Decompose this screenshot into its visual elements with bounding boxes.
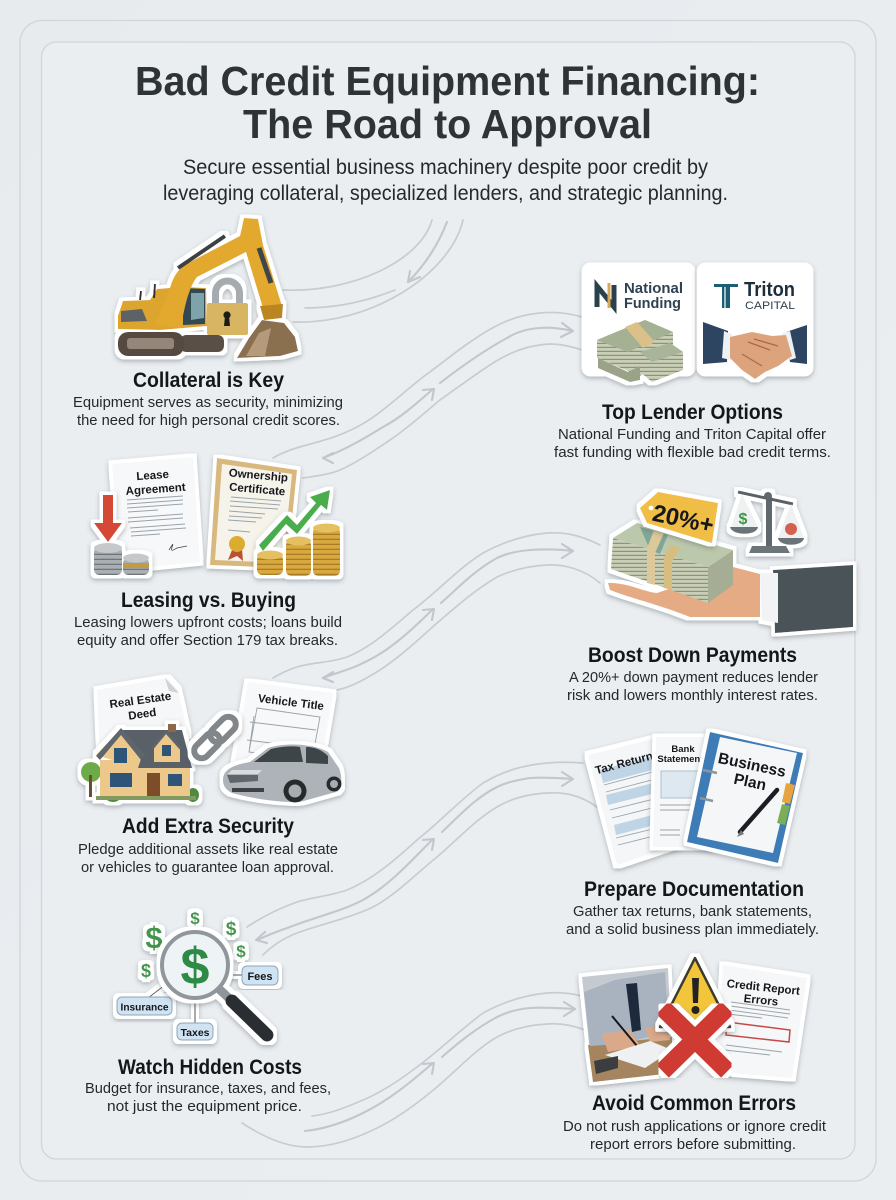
icon: ownership certificate	[210, 458, 297, 568]
icon: red cross	[669, 1014, 721, 1065]
icon: bank statements	[653, 737, 712, 847]
heading: Avoid Common Errors	[592, 1091, 796, 1115]
panel: leasing vs buying	[74, 457, 342, 649]
icon: taxes tag: Taxes	[180, 1027, 210, 1039]
icon: credit report errors document	[717, 965, 807, 1078]
panel: add extra security	[78, 678, 342, 876]
icon: insurance tag	[117, 985, 172, 1015]
arrow: collateral to lenders to leasing	[273, 312, 582, 478]
icon: person signing photo	[582, 968, 673, 1082]
icon: balance scale	[730, 492, 804, 553]
description	[563, 1118, 827, 1153]
description: Equipment serves as security, minimizing	[73, 394, 343, 411]
description	[73, 394, 343, 429]
icon: insurance tag: Insurance	[120, 1002, 169, 1014]
icon: floating dollar signs: $	[236, 942, 246, 961]
description: not just the equipment price.	[107, 1098, 302, 1115]
icon: hand holding money with tag	[608, 523, 853, 633]
icon: business plan binder: Plan	[732, 771, 768, 794]
heading: Collateral is Key	[133, 368, 284, 392]
description: fast funding with flexible bad credit terms.	[554, 444, 831, 461]
description: report errors before submitting.	[590, 1136, 796, 1153]
icon: 20 percent price tag	[640, 492, 718, 543]
panel: collateral is key	[73, 218, 343, 429]
description	[78, 841, 338, 876]
icon: excavator with padlock	[118, 218, 298, 358]
description	[74, 614, 342, 649]
icon: floating dollar signs: $	[226, 919, 237, 940]
heading: Boost Down Payments	[588, 643, 797, 667]
heading: Watch Hidden Costs	[118, 1055, 302, 1079]
icon: lease agreement: Agreement	[125, 482, 186, 498]
panel: top lender options	[554, 266, 831, 461]
icon: floating dollar signs: $	[141, 961, 151, 981]
description: Budget for insurance, taxes, and fees,	[85, 1080, 331, 1097]
description: and a solid business plan immediately.	[566, 921, 819, 938]
description	[567, 669, 818, 704]
icon: real estate deed: Deed	[128, 707, 157, 723]
icon: gold coins and green growth arrow	[257, 490, 340, 576]
arrow: leasing to down payments to security	[273, 533, 600, 690]
icon: triton capital card: Triton	[744, 279, 795, 301]
panel: watch hidden costs	[85, 909, 331, 1115]
icon: red down arrow and silver coins	[94, 495, 149, 575]
icon: house	[81, 724, 199, 802]
arrow: security to documentation to hidden costs	[247, 762, 597, 955]
panel: avoid common errors	[563, 958, 827, 1153]
heading: Prepare Documentation	[584, 877, 804, 901]
icon: balance scale: $	[739, 511, 748, 528]
icon: bank statements: Statements	[657, 754, 709, 765]
icon: tax returns	[588, 738, 683, 865]
icon: triton capital card: CAPITAL	[745, 300, 795, 312]
icon: vehicle title	[234, 682, 333, 770]
description: or vehicles to guarantee loan approval.	[81, 859, 334, 876]
icon: ownership certificate: Certificate	[229, 482, 286, 498]
arrow: hidden costs to common errors	[242, 993, 585, 1147]
subtitle	[163, 156, 728, 205]
description	[554, 426, 831, 461]
icon: national funding card: Funding	[624, 295, 681, 312]
description: Leasing lowers upfront costs; loans build	[74, 614, 342, 631]
icon: ownership certificate: Ownership	[228, 467, 288, 485]
description: National Funding and Triton Capital offer	[558, 426, 826, 443]
description: Gather tax returns, bank statements,	[573, 903, 812, 920]
heading: Add Extra Security	[122, 814, 294, 838]
panel: boost down payments	[567, 492, 853, 704]
icon: credit report errors document: Errors	[743, 993, 779, 1009]
icon: magnifying glass: $	[181, 938, 210, 996]
icon: fees tag	[225, 966, 278, 985]
title: Bad Credit Equipment Financing:	[135, 58, 760, 104]
icon: national funding card	[585, 266, 692, 382]
icon: chain link	[191, 714, 239, 761]
icon: real estate deed	[97, 678, 188, 760]
description: equity and offer Section 179 tax breaks.	[77, 632, 338, 649]
description	[85, 1080, 331, 1115]
icon: vehicle title: Vehicle Title	[257, 693, 324, 713]
panel: prepare documentation	[566, 732, 819, 938]
icon: fees tag: Fees	[247, 971, 273, 983]
title	[135, 58, 760, 147]
icon: floating dollar signs: $	[190, 909, 200, 928]
icon: magnifying glass	[162, 932, 267, 1035]
icon: real estate deed: Real Estate	[109, 691, 172, 711]
icon: bank statements: Bank	[671, 744, 695, 755]
icon: lease agreement: Lease	[136, 469, 169, 483]
icon: triton capital card	[700, 266, 810, 379]
title: The Road to Approval	[243, 101, 652, 147]
icon: taxes tag	[177, 1000, 213, 1040]
heading: Leasing vs. Buying	[121, 588, 296, 612]
icon: national funding card: National	[624, 280, 683, 297]
description: A 20%+ down payment reduces lender	[569, 669, 818, 686]
icon: business plan binder: Business	[716, 750, 787, 781]
arrow: intro to collateral	[283, 220, 463, 322]
description: risk and lowers monthly interest rates.	[567, 687, 818, 704]
description	[566, 903, 819, 938]
icon: business plan binder	[687, 732, 803, 863]
description: Do not rush applications or ignore credit	[563, 1118, 827, 1135]
icon: floating dollar signs	[141, 909, 246, 981]
icon: warning triangle	[660, 958, 730, 1027]
subtitle: leveraging collateral, specialized lenders, and strategic planning.	[163, 182, 728, 205]
icon: 20 percent price tag: 20%+	[650, 500, 716, 539]
heading: Top Lender Options	[602, 400, 783, 424]
icon: floating dollar signs: $	[145, 920, 163, 955]
icon: lease agreement	[112, 457, 200, 570]
subtitle: Secure essential business machinery despite poor credit by	[183, 156, 708, 179]
icon: silver car	[223, 745, 342, 802]
icon: credit report errors document: Credit Report	[726, 978, 801, 998]
description: Pledge additional assets like real estate	[78, 841, 338, 858]
icon: tax returns: Tax Returns	[594, 749, 660, 777]
description: the need for high personal credit scores.	[77, 412, 340, 429]
